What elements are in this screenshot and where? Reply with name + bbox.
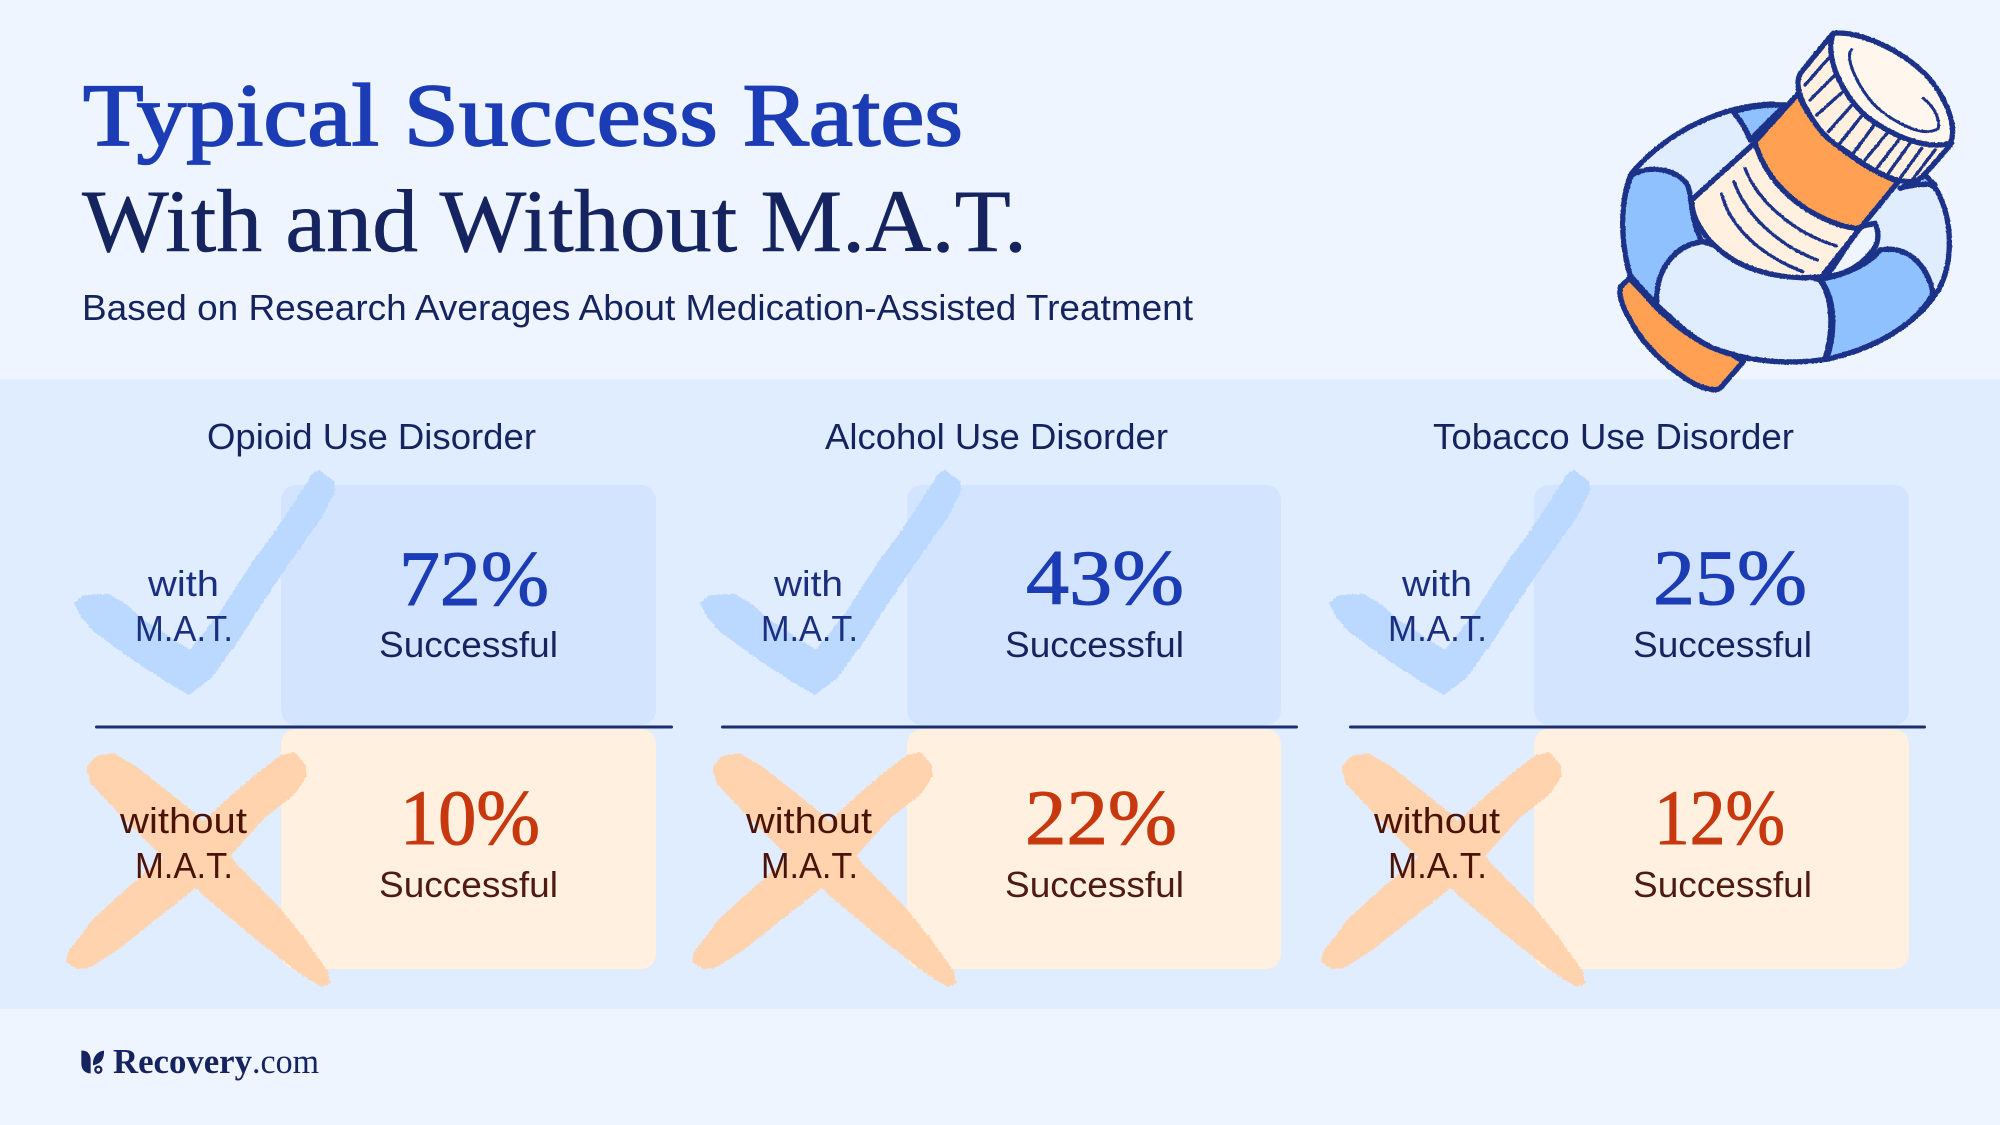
icon: pill bottle in a life ring	[1620, 33, 1953, 390]
heading: Tobacco Use Disorder	[1433, 416, 1794, 457]
cap ribs	[1805, 57, 1935, 178]
with value: 25%	[1653, 534, 1807, 621]
bottle orange band	[1755, 93, 1898, 228]
icon: check mark	[1331, 472, 1589, 693]
without caption: Successful	[379, 864, 558, 905]
icon: logo mark	[81, 1051, 104, 1073]
without label	[1373, 800, 1500, 886]
title line 2: With and Without M.A.T.	[82, 173, 1027, 271]
with label	[1388, 563, 1487, 649]
with card	[907, 485, 1281, 725]
icon: check mark	[76, 472, 334, 693]
with label: M.A.T.	[135, 608, 233, 649]
icon: cross mark	[693, 753, 955, 985]
cap top	[1831, 33, 1953, 145]
title block	[82, 67, 1193, 328]
with caption: Successful	[379, 624, 558, 665]
ring segment: small upper right blue	[1900, 175, 1935, 188]
without label	[745, 800, 872, 886]
without caption: Successful	[1005, 864, 1184, 905]
heading: Alcohol Use Disorder	[825, 416, 1168, 457]
with caption: Successful	[1005, 624, 1184, 665]
life ring	[1623, 104, 1949, 362]
icon: cross mark	[67, 753, 329, 985]
without value: 10%	[400, 774, 540, 861]
without value: 12%	[1654, 774, 1785, 861]
central band panel	[0, 379, 2000, 1009]
ring segment: right blue	[1820, 249, 1933, 359]
wordmark suffix: .com	[252, 1042, 319, 1081]
cap ribbed side	[1798, 35, 1952, 182]
with label: M.A.T.	[1388, 608, 1487, 649]
without label: M.A.T.	[1388, 845, 1487, 886]
panel: alcohol use disorder	[693, 416, 1298, 985]
with label: with	[1401, 563, 1472, 604]
title line 1: Typical Success Rates	[83, 67, 963, 165]
with value: 43%	[1026, 534, 1184, 621]
without label: M.A.T.	[135, 845, 233, 886]
cap top inner line	[1849, 49, 1939, 132]
wordmark: Recovery	[113, 1042, 252, 1081]
label lines	[1722, 168, 1837, 272]
panel: tobacco use disorder	[1322, 416, 1926, 985]
ring hole	[1827, 223, 1878, 277]
with card	[1534, 485, 1909, 725]
logo	[81, 1042, 319, 1081]
with card	[281, 485, 656, 725]
without card	[907, 729, 1281, 969]
bottle base	[1620, 278, 1743, 390]
with label: with	[147, 563, 219, 604]
with label: M.A.T.	[761, 608, 858, 649]
ring segment: left blue	[1623, 169, 1702, 303]
with label	[761, 563, 858, 649]
with caption: Successful	[1633, 624, 1812, 665]
without label: without	[119, 800, 247, 841]
without label: without	[745, 800, 872, 841]
without label	[119, 800, 247, 886]
without card	[281, 729, 656, 969]
with label: with	[773, 563, 843, 604]
without card	[1534, 729, 1909, 969]
ring segment: top blue	[1733, 105, 1785, 140]
with label	[135, 563, 233, 649]
panel: opioid use disorder	[67, 416, 673, 985]
subtitle: Based on Research Averages About Medication-Assisted Treatment	[82, 287, 1193, 328]
with value: 72%	[399, 535, 549, 622]
without caption: Successful	[1633, 864, 1812, 905]
without label: M.A.T.	[761, 845, 858, 886]
ring segment: front light	[1657, 242, 1831, 362]
without value: 22%	[1025, 774, 1177, 861]
icon: cross mark	[1322, 753, 1584, 985]
bottle label	[1692, 144, 1860, 278]
icon: check mark	[702, 472, 960, 693]
heading: Opioid Use Disorder	[207, 416, 536, 457]
without label: without	[1373, 800, 1500, 841]
